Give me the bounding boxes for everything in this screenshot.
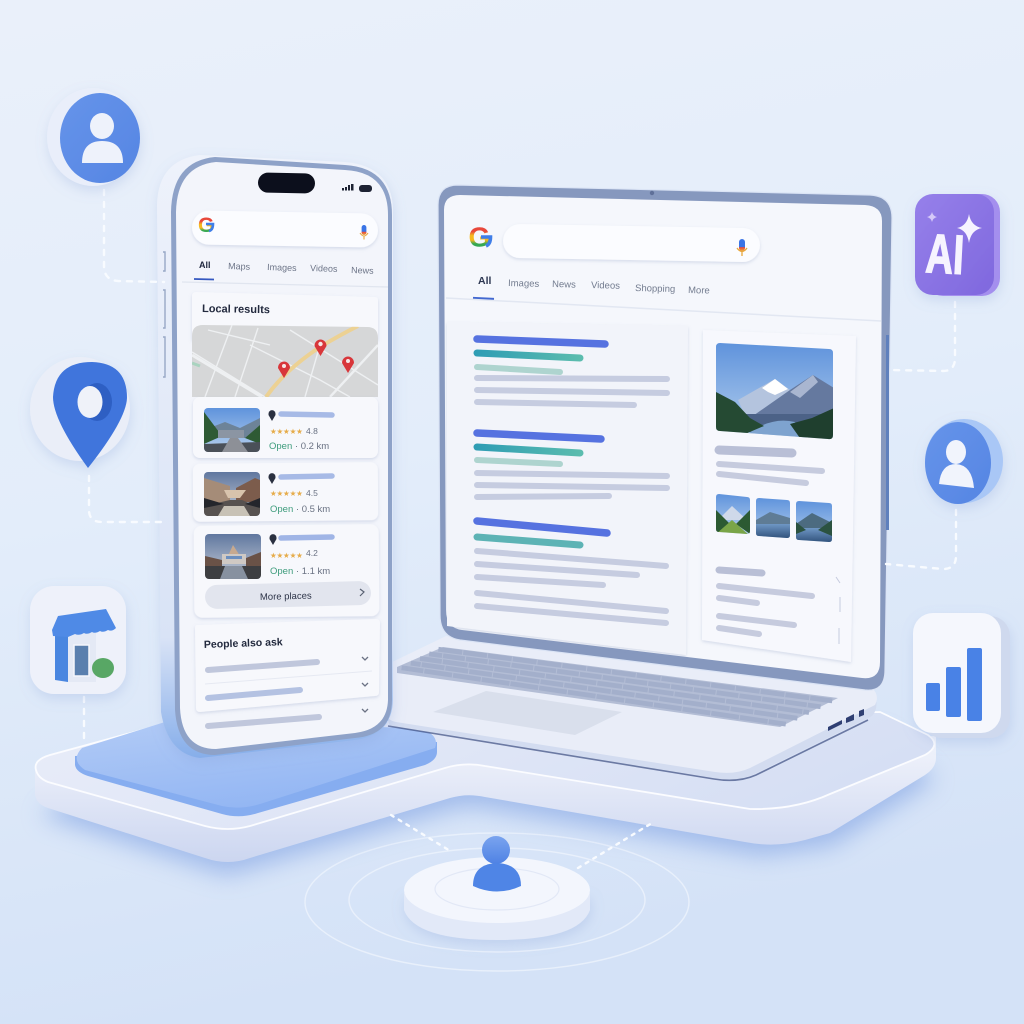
name bar	[281, 537, 332, 538]
phone tabs: Images	[267, 262, 297, 273]
question bars	[208, 662, 319, 726]
result card three	[194, 524, 379, 618]
laptop tabs: Shopping	[635, 283, 675, 295]
status icons	[342, 184, 372, 192]
bars	[926, 648, 982, 721]
user figure	[473, 836, 521, 892]
side buttons	[163, 252, 165, 377]
photo	[204, 472, 260, 516]
dynamic island	[258, 173, 315, 194]
laptop tabs	[473, 275, 710, 299]
laptop base	[386, 636, 877, 780]
local results panel	[192, 292, 378, 397]
phone stand plate	[75, 722, 437, 816]
laptop tabs: Images	[508, 278, 540, 290]
disc	[404, 893, 590, 940]
rating: 4.8	[306, 426, 318, 436]
platform base	[35, 712, 936, 876]
photo	[205, 534, 261, 579]
people also ask panel	[195, 619, 380, 726]
icon: location pin	[30, 357, 130, 468]
ports	[828, 709, 864, 731]
laptop tabs: Videos	[591, 280, 620, 292]
laptop	[386, 185, 892, 780]
phone frame	[171, 157, 392, 755]
icon: user profile top left	[47, 88, 140, 186]
phone tabs	[194, 260, 374, 280]
dashed connectors	[84, 190, 956, 868]
laptop tabs: More	[688, 285, 710, 297]
status: Open · 0.2 km	[269, 441, 329, 452]
keyboard	[397, 647, 838, 727]
pin	[269, 534, 277, 545]
result two	[477, 433, 667, 497]
laptop tabs: All	[478, 275, 492, 287]
status: Open · 1.1 km	[270, 566, 330, 577]
result card two	[193, 462, 378, 522]
main mountain photo	[716, 343, 834, 441]
laptop screen	[444, 195, 882, 678]
google logo phone: G	[198, 214, 214, 237]
AI label: AI	[924, 222, 966, 286]
icon: bar chart tile	[913, 613, 1010, 738]
stars: ★★★★★	[270, 489, 303, 498]
phone screen	[176, 162, 388, 749]
name bar	[281, 476, 332, 477]
result card one	[193, 397, 378, 458]
phone tabs: All	[199, 260, 211, 270]
lid edge highlight	[886, 335, 889, 530]
rating: 4.5	[306, 488, 318, 498]
stars: ★★★★★	[270, 427, 303, 436]
result one	[477, 339, 667, 405]
laptop tabs: News	[552, 279, 576, 291]
microphone	[737, 239, 747, 256]
trackpad	[433, 691, 622, 735]
pin	[268, 473, 276, 484]
rating: 4.2	[306, 548, 318, 558]
google logo laptop: G	[468, 222, 490, 252]
result three	[477, 521, 666, 623]
more places button	[205, 581, 371, 609]
camera	[650, 191, 654, 195]
name bar	[281, 414, 332, 415]
laptop lid frame	[438, 185, 892, 690]
map pins	[278, 340, 354, 378]
photo	[204, 408, 260, 452]
chevrons	[362, 657, 368, 712]
phone body	[157, 155, 393, 758]
icon: user profile right	[925, 419, 1003, 504]
pin	[268, 410, 276, 421]
map	[192, 325, 378, 397]
laptop search bar	[503, 224, 760, 262]
stars: ★★★★★	[270, 551, 303, 560]
phone tabs: News	[351, 265, 374, 276]
icon: storefront	[30, 586, 126, 694]
smartphone	[157, 155, 393, 758]
main results panel	[447, 322, 688, 655]
status: Open · 0.5 km	[270, 504, 330, 515]
phone tabs: Maps	[228, 261, 251, 272]
more places button: More places	[260, 591, 312, 603]
phone tabs: Videos	[310, 263, 338, 274]
phone search bar	[192, 210, 378, 248]
user node	[404, 836, 590, 940]
photo thumbnails	[716, 494, 833, 543]
icon: AI badge	[915, 194, 1000, 296]
microphone	[360, 225, 368, 240]
knowledge panel	[702, 330, 856, 662]
people also ask heading: People also ask	[204, 636, 283, 651]
signal rings around the user node	[305, 833, 689, 971]
tab divider	[446, 298, 881, 321]
local results heading: Local results	[202, 303, 270, 316]
